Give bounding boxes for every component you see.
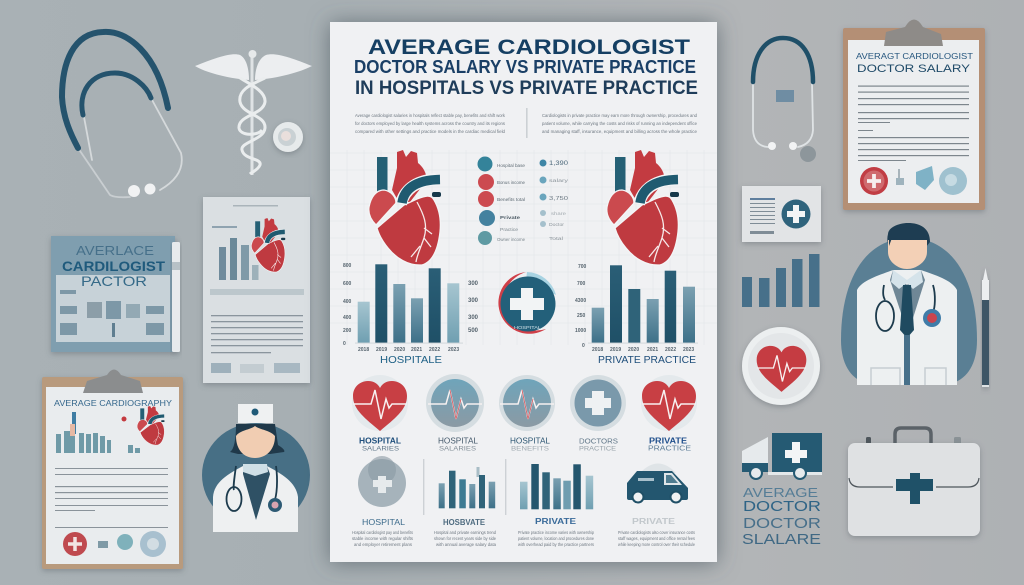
grid lines (330, 150, 717, 345)
document heart (251, 218, 285, 272)
legend labels: Benefits total (497, 197, 525, 202)
column text: fourth: while keeping more control over their schedule (618, 542, 695, 547)
hospital axis labels (343, 263, 479, 347)
icon: heart pulse circle (499, 375, 555, 431)
text: average doctor salare: AVERAGE (743, 485, 818, 500)
legend labels: Total (549, 236, 563, 241)
hospital axis labels: 400 (343, 299, 352, 305)
icon labels: HOSPITAL (510, 436, 551, 446)
icon labels: DOCTORS (579, 436, 618, 446)
clip (884, 20, 943, 46)
clipboard title: AVERAGT CARDIOLOGIST (856, 51, 973, 61)
icon: medical briefcase (848, 428, 980, 536)
legend labels: Hospital base (497, 163, 525, 168)
icon labels: PRIVATE (649, 436, 688, 446)
icon: heart five (641, 375, 697, 431)
icon: pen (172, 242, 180, 352)
icon: caduceus (195, 50, 312, 175)
icon labels: BENEFITS (511, 446, 549, 452)
private axis labels (575, 264, 587, 349)
legend labels: Practice (500, 227, 519, 232)
private year labels (592, 347, 694, 353)
legend labels: Doctor (549, 222, 565, 227)
column labels: HOSBVATE (443, 518, 486, 527)
legend labels: 3,750 (549, 196, 568, 202)
coat pockets (871, 368, 946, 385)
hospital axis labels: 600 (343, 281, 352, 287)
text: average doctor salare: DOCTOR (743, 515, 821, 532)
hospital year labels: 2023 (448, 347, 459, 353)
panel: right clipboard (843, 20, 985, 210)
panel: average cardiologist pactor card (51, 236, 175, 352)
icon labels: SALARIES (439, 446, 477, 452)
legend labels: Bonus income (497, 180, 525, 185)
badge: medical cross: HOSPITAL (514, 325, 542, 330)
card title: AVERLACE (76, 243, 154, 258)
divider (422, 459, 425, 515)
doctor stethoscope (876, 285, 935, 331)
title: IN HOSPITALS VS PRIVATE PRACTICE (355, 78, 698, 99)
private bars (592, 265, 695, 343)
legend labels: share (551, 211, 567, 216)
clipboard icons (860, 166, 967, 195)
legend labels (497, 161, 569, 242)
icon: disc (273, 122, 303, 152)
private year labels: 2018 (592, 347, 603, 353)
text block: left intro (355, 113, 506, 134)
title: AVERAGE CARDIOLOGIST (368, 36, 690, 59)
column text: third: patient volume, location and procedures done (518, 536, 594, 541)
bar chart: small one (439, 467, 495, 508)
icon: van (627, 464, 688, 502)
text block: left intro: Average cardiologist salaries in hospitals reflect stable pay, benefits and shift work (355, 113, 506, 118)
clipboard icons (63, 531, 166, 557)
hospital year labels (358, 347, 459, 353)
divider (526, 108, 528, 138)
text block: right intro: Cardiologists in private practice may earn more through ownership, procedures and (542, 113, 697, 118)
icon: left heart (369, 150, 441, 265)
text: average doctor salare (742, 485, 821, 548)
hospital bars (358, 264, 459, 343)
private axis labels: 700 (578, 264, 587, 270)
column text: hospital: stable income with regular shifts (352, 536, 414, 541)
panel: left clipboard (42, 370, 183, 569)
icon: pulse circle (426, 374, 484, 432)
hospital year labels: 2020 (394, 347, 405, 353)
card title: CARDILOGIST (62, 258, 165, 274)
icon labels: PRACTICE (648, 446, 691, 452)
private year labels: 2021 (647, 347, 658, 353)
column text: fourth: Private cardiologists also cover insurance costs (618, 530, 696, 535)
hospital axis labels: 0 (343, 341, 346, 347)
clipboard title: AVERAGE CARDIOGRAPHY (54, 398, 172, 408)
nurse stethoscope (226, 466, 277, 511)
column text: second: Hospital and private earnings trend (434, 530, 496, 535)
hospital axis labels: 400 (343, 315, 352, 321)
panel: small card (742, 186, 821, 242)
private year labels: 2019 (610, 347, 621, 353)
column text: hospital: and employer retirement plans (354, 542, 413, 547)
column labels: HOSPITAL (362, 518, 406, 527)
chart label: hospitale: HOSPITALE (380, 355, 442, 366)
chart label: private practice: PRIVATE PRACTICE (598, 355, 696, 366)
column text: fourth (618, 530, 696, 547)
icon: faded hospital circle (358, 456, 406, 507)
bar chart: private practice (575, 264, 698, 353)
figure: nurse (202, 404, 310, 532)
icon: heart badge (742, 327, 820, 405)
card title (62, 243, 165, 289)
column text: third: with overhead paid by the practice partners (518, 542, 595, 547)
private axis labels: 4300 (575, 298, 586, 304)
text block: left intro: for doctors employed by large health systems across the country and its regions (355, 121, 506, 126)
text: average doctor salare: DOCTOR (743, 498, 821, 515)
icon labels (359, 436, 691, 452)
hospital year labels: 2019 (376, 347, 387, 353)
hospital axis labels: 300 (468, 281, 479, 287)
column text: second: with annual average salary data (436, 542, 496, 547)
legend labels: Owner income (497, 237, 525, 242)
icon labels: HOSPITAL (438, 436, 479, 446)
column text: third: Private practice income varies with ownership (518, 530, 594, 535)
icon: right heart (607, 150, 679, 265)
column text: second (434, 530, 496, 547)
panel: central poster (330, 22, 717, 562)
panel: chart document (203, 197, 310, 383)
private axis labels: 0 (582, 343, 585, 349)
badge: medical cross (498, 272, 556, 334)
clipboard chart (56, 412, 140, 453)
bar chart: small two (520, 464, 593, 509)
column text: second: shown for recent years side by side (434, 536, 496, 541)
icon: cross circle (570, 375, 626, 431)
column labels: PRIVATE (632, 517, 676, 526)
legend labels: salary (549, 178, 569, 183)
legend (478, 156, 569, 245)
private axis labels: 700 (577, 281, 586, 287)
column text: fourth: staff wages, equipment and office rental fees (618, 536, 696, 541)
clipboard title: DOCTOR SALARY (857, 63, 971, 75)
icon row (352, 374, 697, 432)
text block: right intro: patient volume, while carrying the costs and risks of running an independent office (542, 121, 697, 126)
clipboard text lines (858, 86, 969, 161)
legend dots (478, 156, 546, 245)
column text: hospital (352, 530, 414, 547)
divider (504, 459, 507, 515)
text block: right intro (542, 113, 697, 134)
title: DOCTOR SALARY VS PRIVATE PRACTICE (354, 56, 696, 77)
private year labels: 2022 (665, 347, 676, 353)
private axis labels: 250 (577, 313, 586, 319)
clipboard heart (137, 406, 165, 445)
private year labels: 2023 (683, 347, 694, 353)
icon labels: SALARIES (362, 446, 400, 452)
icon: right pen (982, 268, 989, 387)
card lines (750, 198, 775, 234)
card tiles (60, 290, 164, 337)
card title: PACTOR (81, 273, 147, 289)
icon: ambulance truck (742, 433, 822, 479)
column labels (362, 517, 676, 527)
bar chart: hospital (343, 263, 479, 353)
hospital axis labels: 300 (468, 298, 479, 304)
column text: third (518, 530, 595, 547)
clipboard title (856, 51, 973, 75)
hospital axis labels: 200 (343, 328, 352, 334)
column labels: PRIVATE (535, 517, 577, 526)
hospital axis labels: 300 (468, 315, 479, 321)
icon: small stethoscope (753, 38, 816, 162)
icon: heart one (352, 375, 408, 431)
title (354, 36, 698, 99)
text block: right intro: and managing staff, insurance, equipment and billing across the whole practice (542, 129, 697, 134)
bar chart: right rising bars (742, 254, 820, 307)
private axis labels: 1000 (575, 328, 586, 334)
hospital axis labels: 500 (468, 328, 479, 334)
legend labels: 1,390 (549, 161, 569, 167)
text block: left intro: compared with other settings and practice models in the cardiac medical field (355, 129, 505, 134)
hospital year labels: 2021 (411, 347, 422, 353)
hospital year labels: 2018 (358, 347, 369, 353)
clipboard text lines (55, 468, 168, 528)
column text: hospital: Hospital cardiologist pay and benefits (352, 530, 414, 535)
document text lines (210, 205, 304, 373)
legend labels: Private (500, 215, 521, 220)
figure: doctor (841, 223, 977, 385)
clip (83, 370, 143, 393)
document bars (219, 238, 258, 280)
icon labels: HOSPITAL (359, 436, 401, 446)
icon labels: PRACTICE (579, 446, 617, 452)
hospital year labels: 2022 (429, 347, 440, 353)
private year labels: 2020 (628, 347, 639, 353)
card cross (782, 200, 810, 228)
icon: large stethoscope (62, 32, 182, 197)
hospital axis labels: 800 (343, 263, 352, 269)
text: average doctor salare: SLALARE (742, 531, 821, 548)
